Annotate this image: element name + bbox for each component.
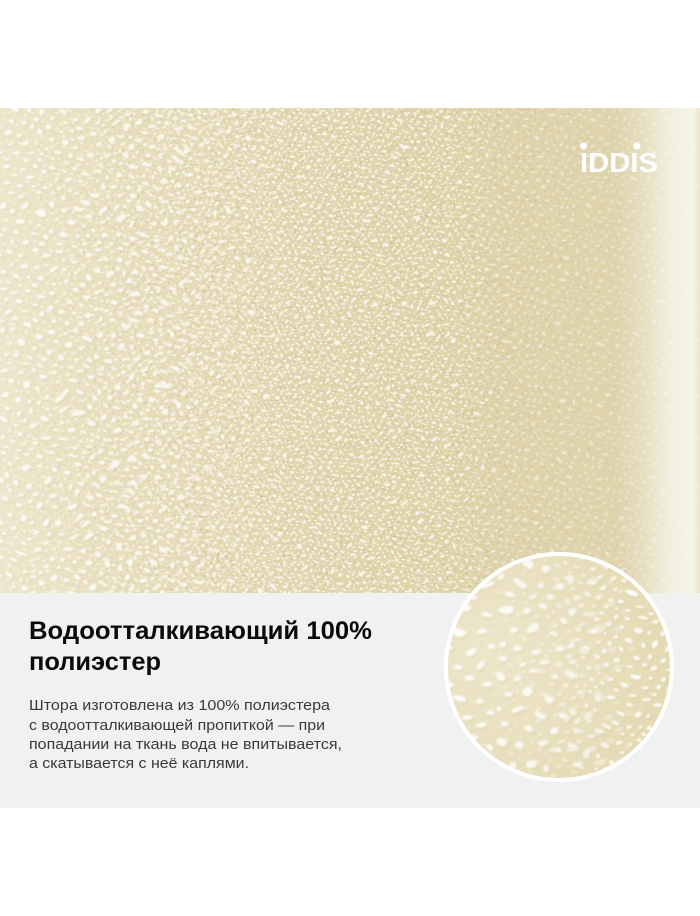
panel: grey text panel — [0, 593, 700, 808]
logo: iddis: IDDIS — [580, 147, 658, 178]
photo: water droplets on beige fabric — [0, 88, 700, 613]
text block: description — [29, 698, 342, 772]
heading: полиэстер — [29, 648, 161, 676]
circular detail: droplets close-up — [444, 552, 674, 782]
text block: description: Штора изготовлена из 100% полиэстера — [29, 698, 331, 714]
heading: Водоотталкивающий 100% — [29, 617, 372, 645]
heading — [29, 617, 372, 676]
text block: description: а скатывается с неё каплями. — [29, 756, 249, 772]
text block: description: с водоотталкивающей пропиткой — при — [29, 718, 325, 734]
text block: description: попадании на ткань вода не впитывается, — [29, 737, 342, 753]
